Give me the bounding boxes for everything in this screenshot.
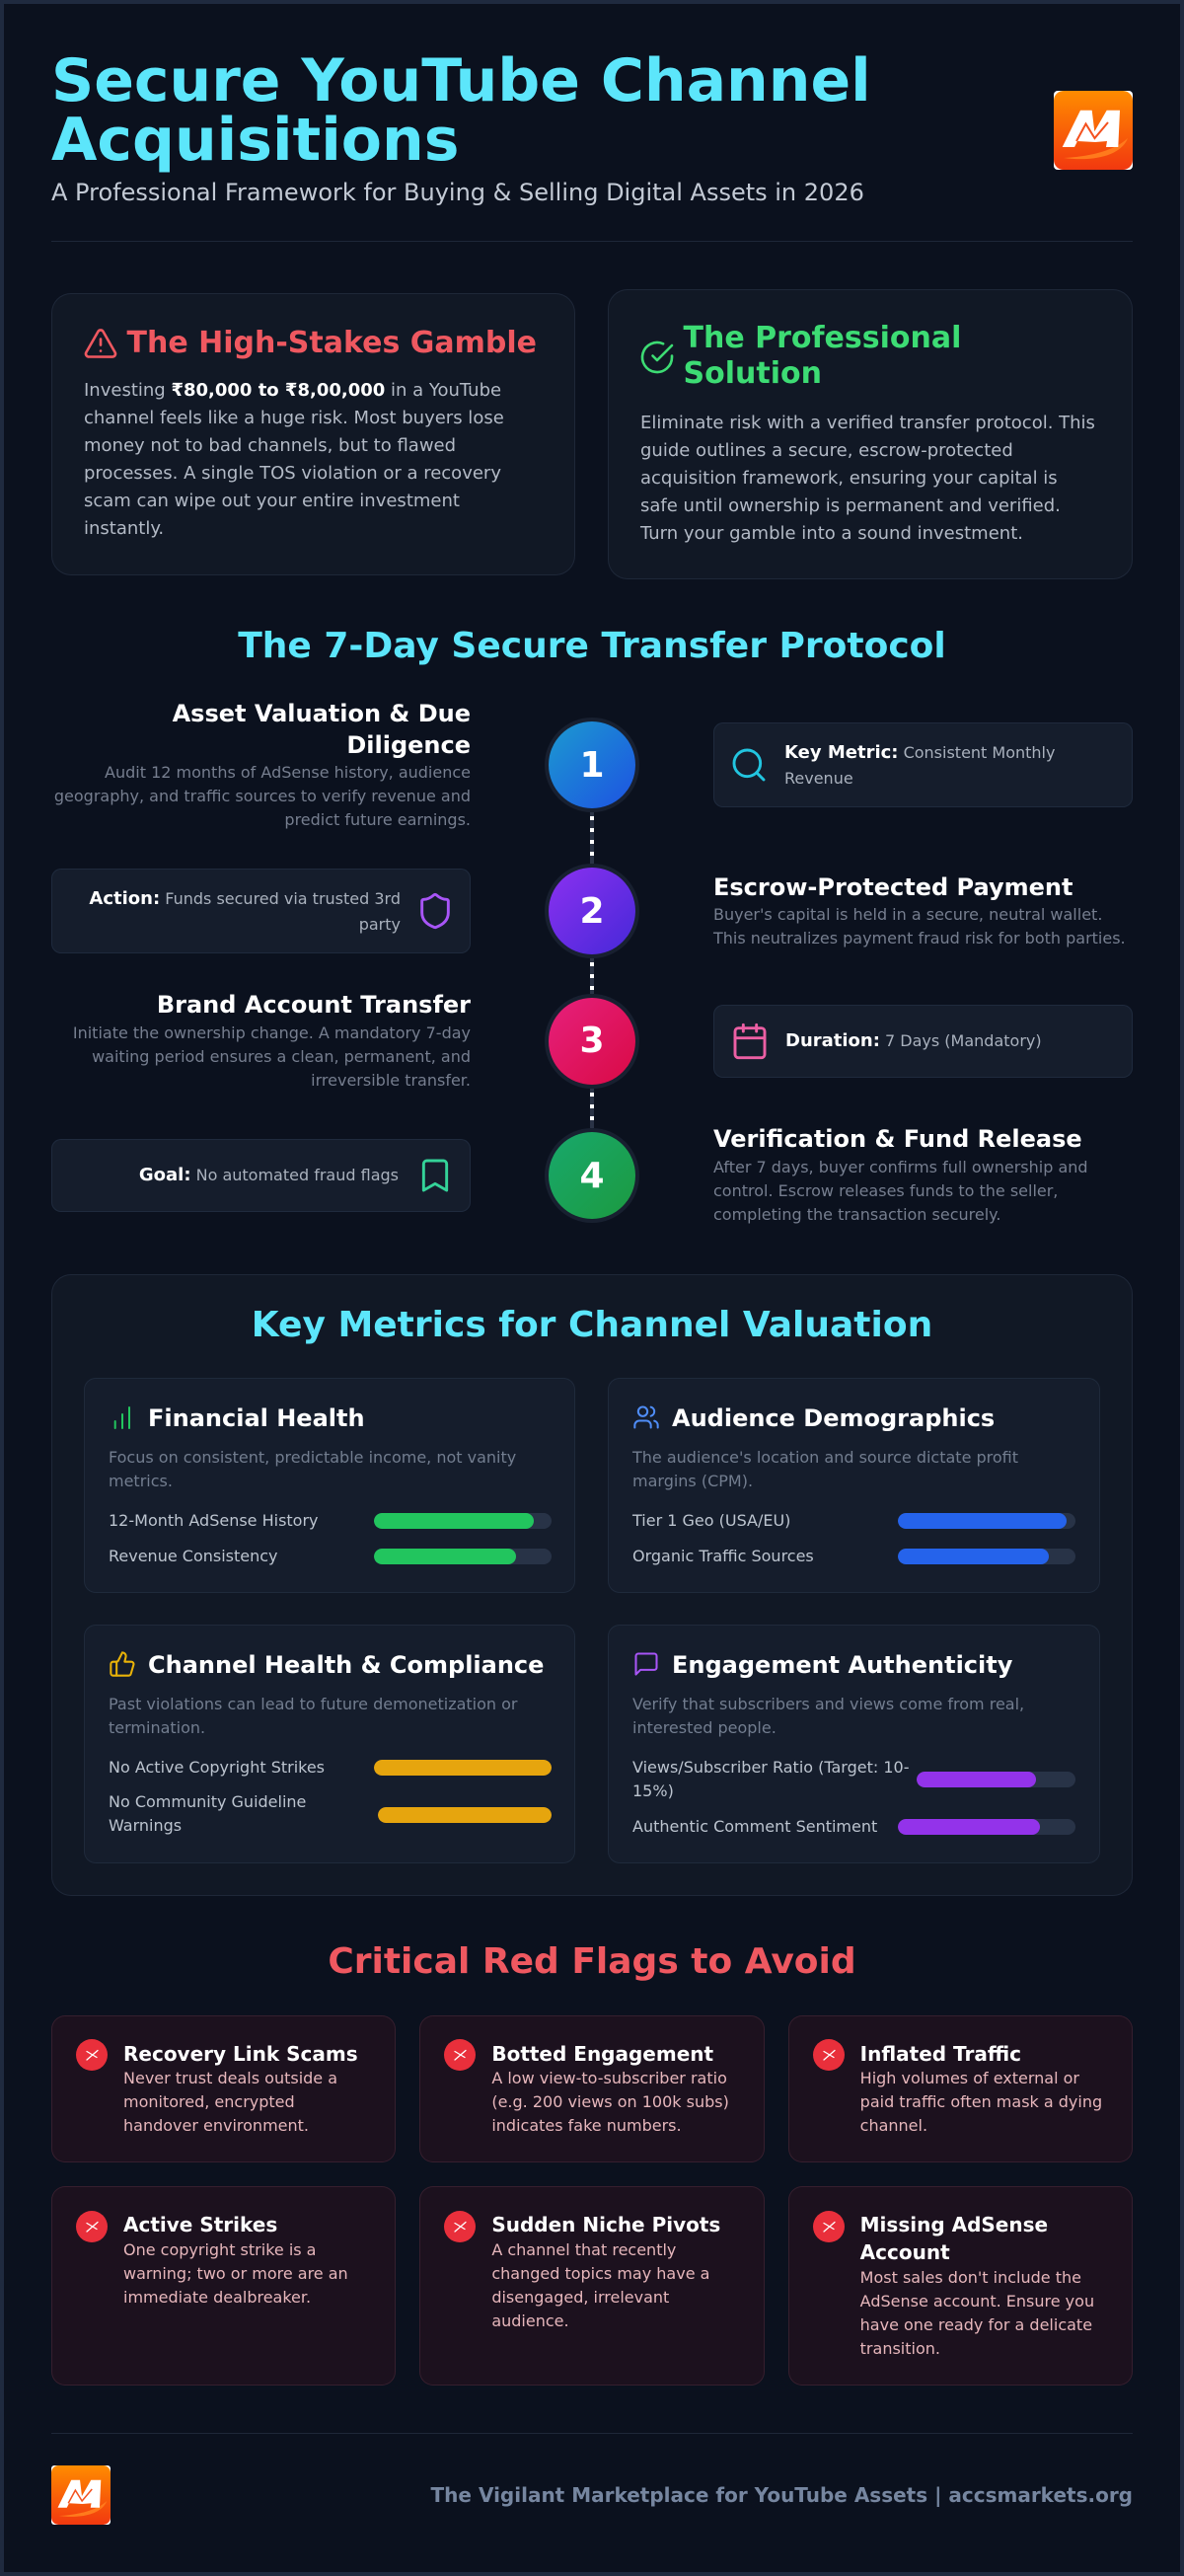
flag text	[491, 2238, 709, 2333]
flag text	[123, 2240, 348, 2307]
description	[109, 1448, 516, 1490]
flag text: High volumes of external or	[860, 2069, 1079, 2087]
flag text: indicates fake numbers.	[491, 2116, 682, 2135]
connector 1-2	[590, 812, 594, 864]
heading	[683, 321, 961, 391]
body text: channel feels like a huge risk. Most buyers lose	[84, 407, 504, 428]
body text: scam can wipe out your entire investment	[84, 490, 460, 511]
callout text	[784, 742, 1055, 788]
flag text: changed topics may have a	[491, 2264, 709, 2283]
goal callout	[51, 1139, 471, 1212]
heading: Audience Demographics	[672, 1404, 995, 1432]
footer text: The Vigilant Marketplace for YouTube Assets | accsmarkets.org	[431, 2483, 1133, 2507]
red flag: recovery link scams	[51, 2015, 396, 2161]
flag text: paid traffic often mask a dying	[860, 2092, 1102, 2111]
callout text: Key Metric: Consistent Monthly	[784, 742, 1055, 762]
body text: Turn your gamble into a sound investment.	[640, 523, 1023, 544]
description: Focus on consistent, predictable income, not vanity	[109, 1448, 516, 1467]
red flag: inflated traffic	[788, 2015, 1133, 2161]
step 1 description: Audit 12 months of AdSense history, audience	[105, 762, 471, 782]
flag title: Sudden Niche Pivots	[491, 2213, 720, 2236]
icon: users	[633, 1405, 659, 1429]
flag title: Botted Engagement	[491, 2041, 713, 2065]
metric label	[632, 1758, 909, 1800]
flag text: monitored, encrypted	[123, 2092, 295, 2111]
icon: warning triangle	[85, 329, 116, 358]
flag text: Never trust deals outside a	[123, 2069, 337, 2087]
title	[51, 46, 871, 175]
icon: brand logo	[1054, 91, 1133, 170]
metric card: financial health	[84, 1378, 575, 1593]
step 4 number: 4	[579, 1155, 605, 1196]
step 4 number	[549, 1132, 635, 1219]
metric label	[109, 1792, 306, 1835]
step 3 title: Brand Account Transfer	[157, 991, 471, 1019]
callout text: party	[359, 914, 401, 934]
metric card: channel health and compliance	[84, 1625, 575, 1863]
title: Acquisitions	[51, 106, 459, 175]
icon: red cross	[813, 2039, 845, 2071]
icon: red cross	[444, 2039, 476, 2071]
progress bar	[378, 1807, 552, 1823]
icon: red cross	[444, 2211, 476, 2242]
callout text: Action: Funds secured via trusted 3rd	[89, 888, 401, 908]
step 4 description: control. Escrow releases funds to the seller,	[713, 1181, 1058, 1200]
flag text: have one ready for a delicate	[860, 2315, 1092, 2333]
flag text: Most sales don't include the	[860, 2268, 1081, 2286]
description: margins (CPM).	[632, 1472, 753, 1490]
body text: Eliminate risk with a verified transfer protocol. This	[640, 413, 1095, 433]
flag title: Missing AdSense	[860, 2213, 1048, 2236]
metric card: engagement authenticity	[608, 1625, 1100, 1863]
icon: calendar	[734, 1023, 766, 1060]
icon: check circle	[641, 341, 673, 373]
metric label: Revenue Consistency	[109, 1547, 278, 1565]
step 4 title: Verification & Fund Release	[713, 1125, 1082, 1153]
flag text: warning; two or more are an	[123, 2264, 348, 2283]
key metric callout	[713, 722, 1133, 807]
progress bar	[898, 1819, 1075, 1835]
body text: money not to bad channels, but to flawed	[84, 434, 456, 456]
metric card: audience demographics	[608, 1378, 1100, 1593]
duration callout	[713, 1005, 1133, 1078]
metric label: No Community Guideline	[109, 1792, 306, 1811]
flag text: AdSense account. Ensure you	[860, 2292, 1094, 2310]
step 3 description: waiting period ensures a clean, permanent, and	[92, 1046, 471, 1066]
heading: Financial Health	[148, 1404, 365, 1432]
flag text: disengaged, irrelevant	[491, 2288, 669, 2307]
step 1 number	[549, 721, 635, 808]
metric label: Views/Subscriber Ratio (Target: 10-	[632, 1758, 909, 1777]
progress bar	[374, 1513, 552, 1529]
step 3 number	[549, 997, 635, 1084]
flag text: audience.	[491, 2311, 569, 2330]
connector 2-3	[590, 958, 594, 994]
step 3 description: Initiate the ownership change. A mandatory 7-day	[73, 1023, 471, 1042]
red flag: active strikes	[51, 2186, 396, 2385]
step 2 description	[712, 905, 1126, 947]
flag text	[860, 2069, 1102, 2135]
description: termination.	[109, 1718, 205, 1737]
icon: bar signal	[114, 1406, 130, 1429]
step 3 description	[73, 1023, 471, 1090]
callout text	[89, 888, 401, 934]
description	[109, 1695, 517, 1737]
heading: Key Metrics for Channel Valuation	[252, 1305, 932, 1345]
step 2 number	[549, 868, 635, 954]
metric label: 12-Month AdSense History	[109, 1511, 319, 1530]
panel: key metrics	[51, 1274, 1133, 1896]
body text: acquisition framework, ensuring your capital is	[640, 468, 1058, 489]
flag text: One copyright strike is a	[123, 2240, 316, 2259]
step 1 title	[172, 700, 471, 759]
progress bar	[898, 1549, 1075, 1564]
step 4 description: After 7 days, buyer confirms full ownership and	[713, 1158, 1088, 1176]
step 1 title: Diligence	[346, 731, 471, 759]
metric label: 15%)	[632, 1781, 674, 1800]
flag title: Account	[860, 2240, 950, 2264]
step 4 description	[713, 1158, 1088, 1224]
callout text: Duration: 7 Days (Mandatory)	[785, 1030, 1042, 1050]
step 1 number: 1	[579, 744, 605, 786]
action callout	[51, 869, 471, 953]
body text: instantly.	[84, 517, 164, 539]
step 1 description	[54, 762, 471, 829]
step 3 number: 3	[579, 1021, 605, 1061]
icon: red cross	[76, 2039, 108, 2071]
flag text: A channel that recently	[491, 2240, 676, 2259]
flag text	[123, 2069, 337, 2135]
heading: transfer protocol: The 7-Day Secure Transfer Protocol	[238, 626, 946, 666]
description	[631, 1448, 1018, 1490]
flag title	[860, 2211, 1048, 2266]
subtitle: A Professional Framework for Buying & Selling Digital Assets in 2026	[51, 179, 864, 206]
red flag: missing adsense account	[788, 2186, 1133, 2385]
progress bar	[898, 1513, 1075, 1529]
body text: Investing ₹80,000 to ₹8,00,000 in a YouTube	[84, 379, 501, 401]
red flag: sudden niche pivots	[419, 2186, 765, 2385]
heading: The Professional	[683, 321, 961, 355]
body text: processes. A single TOS violation or a recovery	[84, 462, 501, 484]
icon: shield	[420, 892, 450, 930]
icon: red cross	[76, 2211, 108, 2242]
heading: Solution	[683, 356, 822, 391]
step 2 title: Escrow-Protected Payment	[713, 873, 1073, 901]
step 2 description: This neutralizes payment fraud risk for both parties.	[713, 929, 1126, 947]
metric label: Warnings	[109, 1816, 182, 1835]
flag text: (e.g. 200 views on 100k subs)	[491, 2092, 729, 2111]
step 4 description: completing the transaction securely.	[713, 1205, 1000, 1224]
red flag: botted engagement	[419, 2015, 765, 2161]
callout text: Revenue	[784, 768, 853, 788]
description: interested people.	[632, 1718, 777, 1737]
heading: Engagement Authenticity	[672, 1651, 1012, 1679]
icon: message	[634, 1652, 657, 1676]
step 2 number: 2	[579, 890, 605, 932]
description: Verify that subscribers and views come from real,	[632, 1695, 1024, 1713]
description: Past violations can lead to future demonetization or	[109, 1695, 517, 1713]
step 3 description: irreversible transfer.	[311, 1070, 471, 1090]
metric label: Organic Traffic Sources	[632, 1547, 814, 1565]
panel: the professional solution	[608, 289, 1133, 579]
icon: search	[732, 748, 766, 782]
flag title: Recovery Link Scams	[123, 2041, 358, 2065]
metric label: Authentic Comment Sentiment	[632, 1816, 877, 1836]
flag text	[860, 2266, 1094, 2361]
connector 3-4	[590, 1089, 594, 1128]
panel: the high-stakes gamble	[51, 293, 575, 575]
progress bar	[917, 1772, 1075, 1787]
metric label: Tier 1 Geo (USA/EU)	[632, 1511, 790, 1530]
flag text: handover environment.	[123, 2116, 309, 2135]
flag title: Inflated Traffic	[860, 2041, 1021, 2065]
heading: Channel Health & Compliance	[148, 1651, 544, 1679]
progress bar	[374, 1760, 552, 1776]
title: Secure YouTube Channel	[51, 46, 871, 115]
description: metrics.	[109, 1472, 173, 1490]
body text: guide outlines a secure, escrow-protected	[640, 440, 1013, 461]
heading: red flags: Critical Red Flags to Avoid	[328, 1941, 856, 1982]
step 2 description: Buyer's capital is held in a secure, neutral wallet.	[713, 905, 1102, 924]
icon: thumbs up	[110, 1651, 134, 1677]
icon: bookmark	[422, 1159, 448, 1192]
flag text	[491, 2069, 729, 2135]
icon: footer logo	[51, 2465, 111, 2525]
metric label: No Active Copyright Strikes	[109, 1758, 325, 1777]
flag text: transition.	[860, 2339, 940, 2357]
callout text: Goal: No automated fraud flags	[139, 1165, 399, 1184]
body text: safe until ownership is permanent and verified.	[640, 495, 1061, 516]
timeline: seven-day protocol steps	[51, 700, 1133, 1224]
step 1 title: Asset Valuation & Due	[173, 700, 471, 727]
body text	[639, 413, 1095, 544]
icon: red cross	[813, 2211, 845, 2242]
flag text: channel.	[860, 2116, 927, 2135]
flag title: Active Strikes	[123, 2213, 277, 2236]
flag text: immediate dealbreaker.	[123, 2288, 311, 2307]
description	[632, 1695, 1024, 1737]
step 1 description: predict future earnings.	[284, 809, 471, 829]
flag text: A low view-to-subscriber ratio	[491, 2069, 727, 2087]
step 1 description: geography, and traffic sources to verify revenue and	[54, 786, 471, 805]
heading: The High-Stakes Gamble	[126, 326, 537, 359]
progress bar	[374, 1549, 552, 1564]
description: The audience's location and source dictate profit	[632, 1448, 1018, 1467]
body text	[84, 379, 504, 539]
